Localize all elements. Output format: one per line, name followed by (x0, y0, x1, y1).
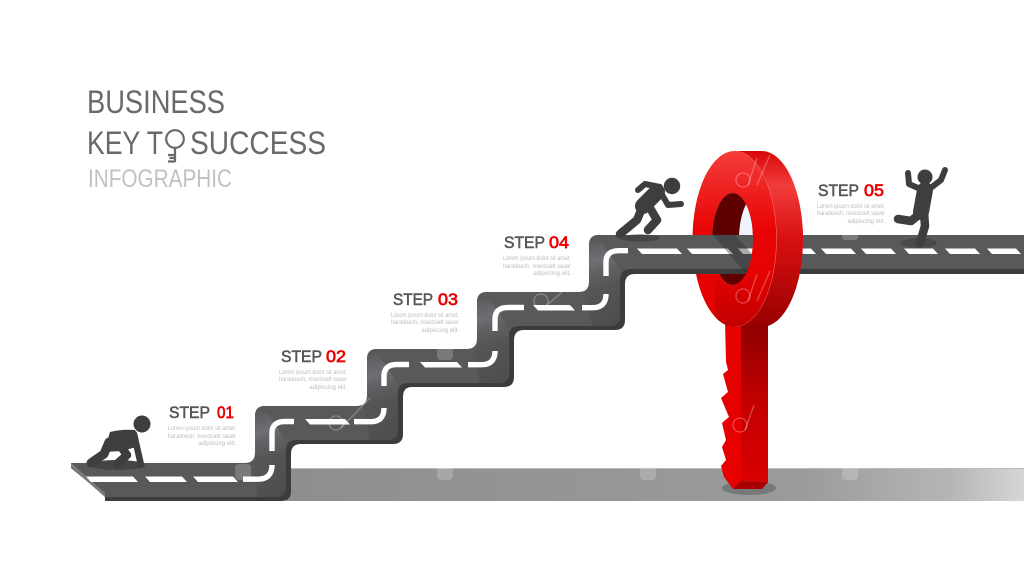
step 5 label: adipiscing elit. (847, 219, 885, 225)
step 3 label: STEP (393, 290, 433, 309)
step 4 label: adipiscing elit. (533, 271, 571, 277)
road side edge (71, 235, 1024, 501)
step 3 label: adipiscing elit. (421, 328, 459, 334)
key ring (692, 151, 803, 330)
step 2 label: STEP (281, 347, 322, 366)
ring hole (712, 193, 753, 285)
step 2 label: haradoesh, nisectuelt sauer (279, 377, 347, 383)
winding road (71, 235, 1024, 501)
road top surface (71, 235, 1024, 497)
runner 3: celebrating figure (898, 170, 945, 248)
step 2 label: adipiscing elit. (309, 385, 347, 391)
step 3 label (391, 290, 459, 334)
title line: BUSINESS: BUSINESS (87, 84, 225, 120)
step 4 label: STEP (504, 233, 545, 252)
road centre line (86, 248, 1021, 482)
step 5 label: Lorem ipsum dolor sit amet, (817, 204, 885, 210)
step 5 label (817, 181, 885, 225)
key (692, 151, 803, 495)
key shaft (721, 320, 768, 489)
step 5 label: 05 (864, 181, 884, 200)
step 2 label: Lorem ipsum dolor sit amet, (279, 370, 347, 376)
step 3 label: Lorem ipsum dolor sit amet, (391, 313, 459, 319)
step 2 label: 02 (326, 347, 346, 366)
title line: KEY TO SUCCESS: SUCCESS (190, 125, 326, 161)
step 4 label: Lorem ipsum dolor sit amet, (503, 256, 571, 262)
step 1 label: adipiscing elit. (198, 441, 236, 447)
step 4 label: 04 (549, 233, 569, 252)
road shadow in key hole (713, 235, 754, 276)
title (87, 84, 326, 193)
subtitle: INFOGRAPHIC: INFOGRAPHIC (88, 165, 232, 193)
step 5 label: haradoesh, nisectuelt sauer (817, 211, 885, 217)
step 4 label: haradoesh, nisectuelt sauer (503, 264, 571, 270)
runner 2: sprinting figure (620, 178, 681, 242)
road fold shading (250, 241, 620, 497)
road tip edge (71, 463, 105, 497)
runner 1: crouching figure (89, 416, 150, 470)
step 1 label: 01 (217, 403, 234, 422)
title line: KEY TO SUCCESS (87, 125, 326, 162)
icon: key as letter O (166, 130, 184, 162)
step 3 label: haradoesh, nisectuelt sauer (391, 320, 459, 326)
ground band (285, 468, 1024, 501)
key shadow (722, 481, 776, 495)
title line: KEY TO SUCCESS: KEY T (87, 125, 163, 161)
step 1 label (168, 403, 236, 447)
step 4 label (503, 233, 571, 277)
step 5 label: STEP (818, 181, 859, 200)
key ring front over road (742, 228, 803, 280)
step 1 label: Lorem ipsum dolor sit amet, (168, 426, 236, 432)
step 2 label (279, 347, 347, 391)
step 3 label: 03 (438, 290, 458, 309)
step 1 label: STEP (169, 403, 210, 422)
step 1 label: haradoesh, nisectuelt sauer (168, 434, 236, 440)
